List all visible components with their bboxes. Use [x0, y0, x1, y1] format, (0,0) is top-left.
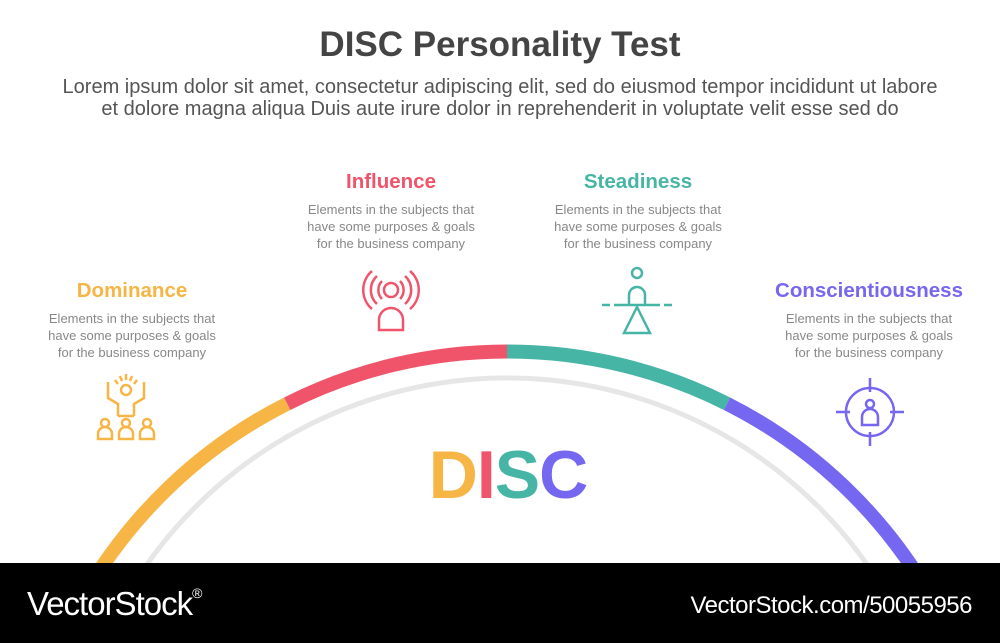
icon: conscientiousness target [836, 378, 904, 446]
panel: influence [307, 170, 475, 251]
panel: dominance: Elements in the subjects that [49, 311, 215, 326]
footer brand: VectorStock® [27, 585, 201, 622]
panel: influence: Influence [346, 170, 436, 193]
panel: steadiness: Steadiness [584, 170, 692, 193]
panel: dominance: Dominance [77, 279, 187, 302]
icon: dominance crowd [96, 374, 156, 440]
icon: steadiness balance [602, 266, 672, 334]
panel: conscientiousness: Elements in the subjects that [786, 311, 952, 326]
subtitle [63, 76, 937, 120]
footer bar [0, 563, 1000, 643]
footer url: VectorStock.com/50055956 [690, 592, 972, 619]
panel: conscientiousness: Conscientiousness [775, 279, 963, 302]
subtitle: et dolore magna aliqua Duis aute irure dolor in reprehenderit in voluptate velit esse sed do [101, 98, 899, 120]
panel: steadiness: for the business company [564, 236, 712, 251]
title: DISC Personality Test [319, 25, 681, 64]
panel: steadiness: Elements in the subjects that [555, 202, 721, 217]
panel: steadiness [554, 170, 722, 251]
panel: conscientiousness: for the business company [795, 345, 943, 360]
panel: dominance: have some purposes & goals [48, 328, 216, 343]
panel: influence: for the business company [317, 236, 465, 251]
panel: influence: Elements in the subjects that [308, 202, 474, 217]
panel: dominance: for the business company [58, 345, 206, 360]
panel: conscientiousness: have some purposes & goals [785, 328, 953, 343]
DISC wordmark: DISC [429, 437, 587, 513]
panel: influence: have some purposes & goals [307, 219, 475, 234]
panel: conscientiousness [775, 279, 963, 360]
panel: steadiness: have some purposes & goals [554, 219, 722, 234]
subtitle: Lorem ipsum dolor sit amet, consectetur adipiscing elit, sed do eiusmod tempor incididunt ut labore [63, 76, 937, 98]
panel: dominance [48, 279, 216, 360]
icon: influence broadcast [362, 270, 420, 332]
